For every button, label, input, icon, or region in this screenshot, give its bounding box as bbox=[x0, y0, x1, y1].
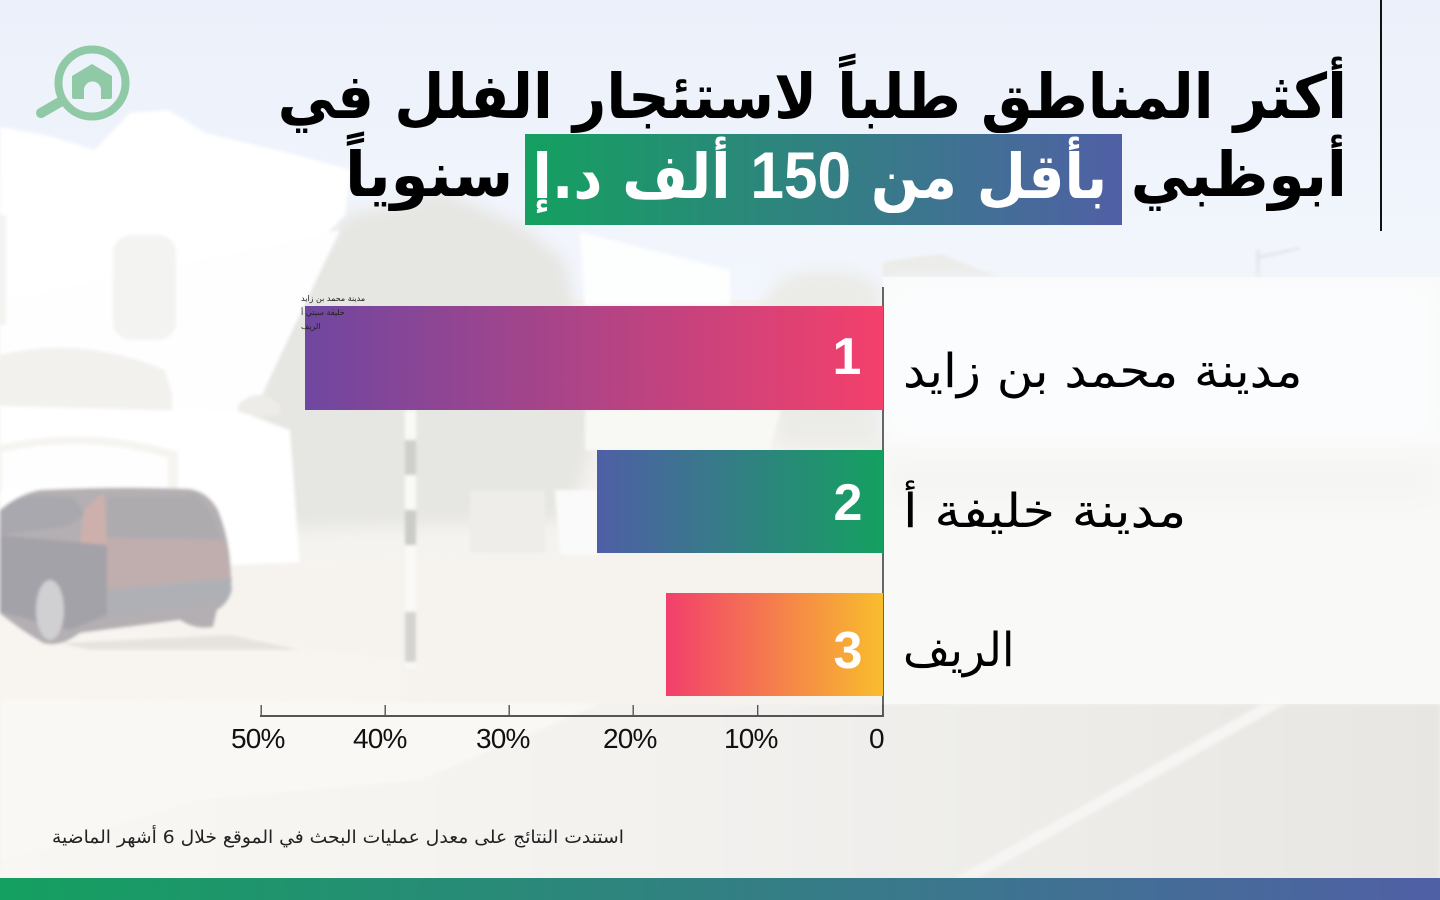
label: مدينة محمد بن زايد: مدينة محمد بن زايد bbox=[903, 344, 1302, 399]
translucent panel behind labels bbox=[883, 277, 1440, 704]
rank 1: 1 bbox=[833, 328, 861, 386]
axis label 10%: 10% bbox=[724, 723, 778, 754]
tiny overlapping labels bbox=[301, 294, 365, 332]
axis label 20%: 20% bbox=[603, 723, 657, 754]
axis label 0: 0 bbox=[869, 723, 884, 754]
bar 1 bbox=[305, 306, 883, 410]
chart bbox=[260, 287, 884, 717]
label: الريف: الريف bbox=[903, 623, 1015, 678]
horizontal axis bbox=[260, 705, 884, 717]
highlighted phrase bbox=[525, 134, 1122, 225]
tiny overlapping labels: خليفة سيتي أ bbox=[301, 308, 345, 317]
word: أبوظبي: أبوظبي bbox=[1131, 138, 1347, 211]
logo icon: magnifier with house bbox=[36, 46, 130, 120]
title line 2 bbox=[345, 131, 1347, 225]
bar 2 bbox=[597, 450, 883, 553]
tiny overlapping labels: الريف bbox=[301, 322, 321, 331]
footnote: استندت النتائج على معدل عمليات البحث في الموقع خلال 6 أشهر الماضية bbox=[52, 827, 624, 848]
rank 3: 3 bbox=[834, 622, 862, 680]
tiny overlapping labels: مدينة محمد بن زايد bbox=[301, 294, 365, 303]
bottom gradient strip bbox=[0, 878, 1440, 900]
title line 1: أكثر المناطق طلباً لاستئجار الفلل في bbox=[278, 60, 1347, 133]
bar 3 bbox=[666, 593, 883, 696]
highlighted text: بأقل من 150 ألف د.إ bbox=[532, 138, 1107, 213]
label: مدينة خليفة أ: مدينة خليفة أ bbox=[903, 484, 1186, 539]
rank 2: 2 bbox=[834, 474, 862, 532]
vertical title rule bbox=[1380, 0, 1382, 231]
word: سنوياً: سنوياً bbox=[345, 138, 513, 211]
axis label 50%: 50% bbox=[231, 723, 285, 754]
vertical axis line bbox=[882, 287, 884, 717]
axis label 30%: 30% bbox=[476, 723, 530, 754]
axis label 40%: 40% bbox=[353, 723, 407, 754]
